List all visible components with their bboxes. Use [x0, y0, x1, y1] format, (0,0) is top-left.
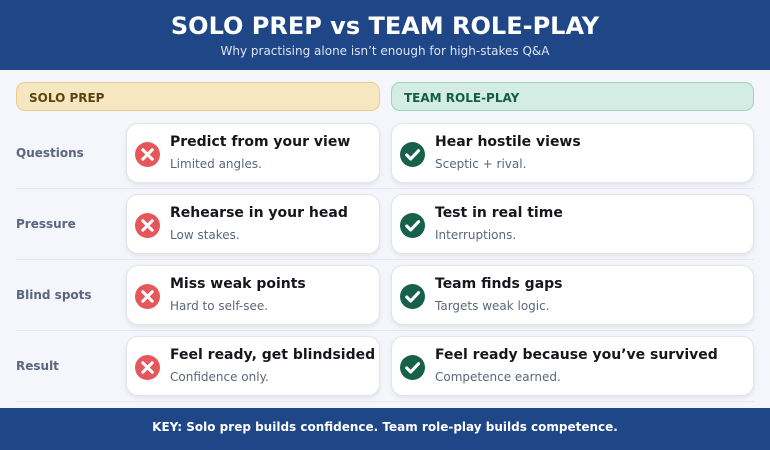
card: solo result: Feel ready, get blindsided	[170, 347, 375, 363]
card: solo questions: Predict from your view	[170, 134, 350, 150]
header	[0, 0, 770, 70]
header: SOLO PREP vs TEAM ROLE-PLAY	[171, 12, 599, 40]
footer key: KEY: Solo prep builds confidence. Team role-play builds competence.	[152, 420, 618, 434]
card: team result: Feel ready because you’ve survived	[435, 347, 718, 363]
card: solo pressure: Rehearse in your head	[170, 205, 348, 221]
row label: Questions: Questions	[16, 146, 84, 160]
card: solo result: Confidence only.	[170, 370, 269, 384]
card: team questions	[391, 123, 754, 183]
card: solo questions: Limited angles.	[170, 157, 262, 171]
row label: Blind spots: Blind spots	[16, 288, 92, 302]
column header: solo	[16, 82, 380, 111]
card: solo questions	[126, 123, 380, 183]
row label: Pressure: Pressure	[16, 217, 76, 231]
column header: solo: SOLO PREP	[29, 91, 104, 105]
card: solo blind spots: Hard to self-see.	[170, 299, 268, 313]
card: team result	[391, 336, 754, 396]
card: team blind spots: Team finds gaps	[435, 276, 562, 292]
card: solo pressure: Low stakes.	[170, 228, 240, 242]
card: solo pressure	[126, 194, 380, 254]
card: team pressure: Interruptions.	[435, 228, 516, 242]
column header: team	[391, 82, 754, 111]
card: team questions: Hear hostile views	[435, 134, 581, 150]
card: team blind spots: Targets weak logic.	[435, 299, 550, 313]
footer key	[0, 408, 770, 450]
card: team blind spots	[391, 265, 754, 325]
card: solo blind spots	[126, 265, 380, 325]
card: team pressure: Test in real time	[435, 205, 563, 221]
card: team result: Competence earned.	[435, 370, 561, 384]
row label: Result: Result	[16, 359, 59, 373]
column header: team: TEAM ROLE-PLAY	[404, 91, 519, 105]
card: team pressure	[391, 194, 754, 254]
card: solo result	[126, 336, 380, 396]
header: Why practising alone isn’t enough for high-stakes Q&A	[220, 44, 549, 58]
card: solo blind spots: Miss weak points	[170, 276, 306, 292]
card: team questions: Sceptic + rival.	[435, 157, 526, 171]
